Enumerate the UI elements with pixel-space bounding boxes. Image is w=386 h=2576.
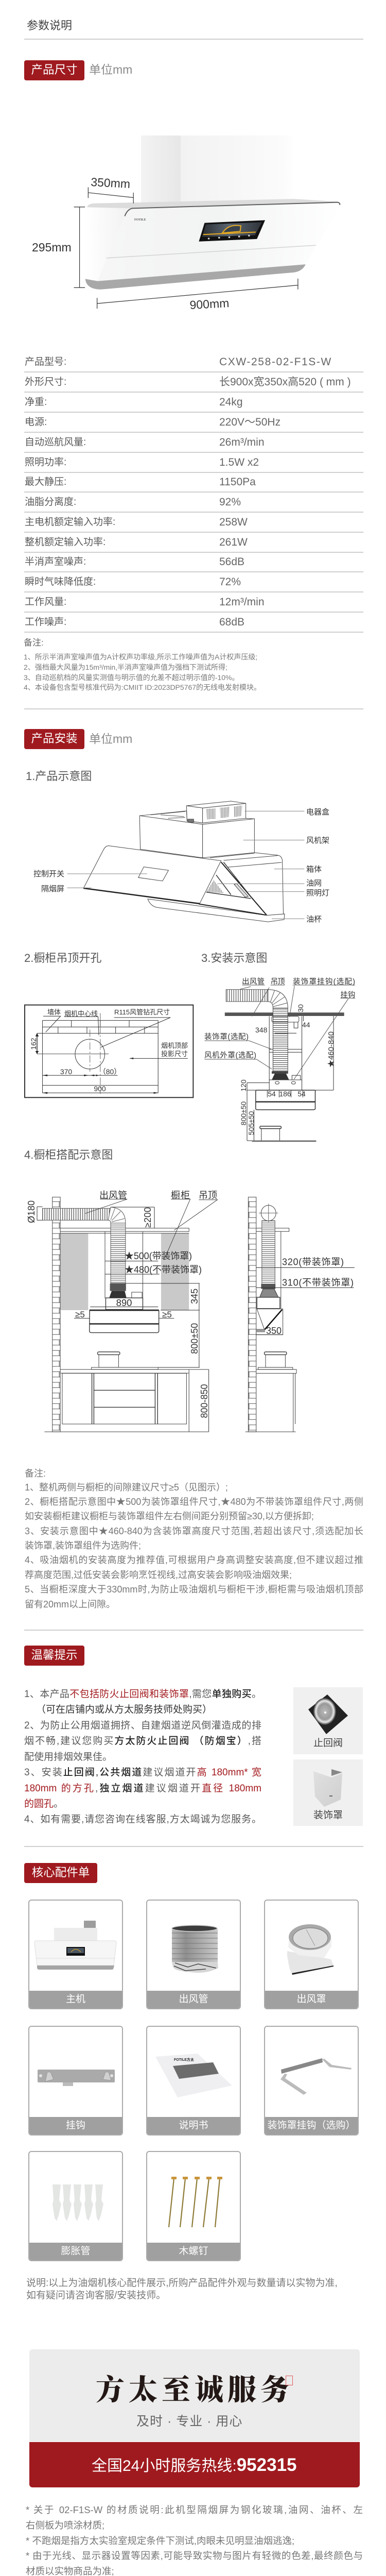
front elevation labels: ★500(带装饰罩) — [125, 1251, 192, 1261]
leader lines — [67, 811, 304, 919]
spec row: 主电机额定输入功率: — [25, 517, 115, 528]
front elevation labels: 吊顶 — [199, 1190, 217, 1200]
diagram 3 labels: 800±50 — [239, 1101, 248, 1125]
spec row — [24, 453, 363, 473]
diagram 3 labels: 186 — [279, 1090, 291, 1098]
diagram 4: cabinet fit drawings — [26, 1190, 355, 1432]
tip 2 end: 配使用排烟效果佳。 — [24, 1752, 112, 1762]
footnote 3: * 由于光线、显示器设置等因素,可能导致实物与图片有轻微的色差,最终颜色与 — [26, 2550, 363, 2561]
diagram 3 labels: ★460-840 — [327, 1031, 336, 1067]
diagram 3 labels: 44 — [302, 1021, 310, 1029]
front elevation labels: 出风管 — [99, 1190, 127, 1200]
tip 4: 4、如有需要,请您咨询在线客服,方太竭诚为您服务。 — [24, 1814, 261, 1825]
spec row: 瞬时气味降低度: — [25, 577, 96, 587]
panel: check valve — [293, 1687, 363, 1754]
front elevation labels: 800-850 — [199, 1384, 209, 1418]
card: hook — [28, 2026, 123, 2136]
diagram 2 labels: 投影尺寸 — [161, 1050, 188, 1058]
fan frame — [139, 811, 254, 858]
diagram 3 labels: 54 — [268, 1090, 276, 1098]
spec row — [24, 393, 363, 413]
diagram labels: 箱体 — [306, 865, 322, 874]
note line 4 continued: 荐高度范围,过低安装会影响烹饪视线,过高安装会影响吸油烟效果; — [25, 1570, 292, 1580]
side elevation labels: 310(不带装饰罩) — [282, 1278, 354, 1288]
diagram 3 labels: 30 — [296, 1004, 305, 1012]
spec row: 1150Pa — [219, 476, 256, 488]
side elevation labels — [266, 1257, 354, 1336]
spec row: 工作风量: — [25, 597, 66, 607]
icon: decorative cover — [313, 1769, 342, 1807]
caption: 出风罩 — [296, 1994, 326, 2005]
spec row: 油脂分离度: — [25, 497, 76, 507]
image: wood screws — [168, 2177, 222, 2228]
front elevation labels: ≥5 — [75, 1310, 85, 1319]
section tag: installation — [24, 729, 84, 749]
section tag: product size — [24, 60, 84, 80]
spec row — [24, 533, 363, 553]
spec row — [24, 613, 363, 633]
diagram labels: 隔烟屏 — [41, 885, 64, 893]
diagram 2 labels: 370 — [60, 1067, 72, 1076]
diagram 2 labels — [29, 1008, 188, 1093]
diagram 2 labels: 烟机中心线 — [64, 1010, 98, 1018]
diagram 3 labels: 装饰罩挂钩(选配) — [293, 977, 355, 986]
tip 3: 3、安装止回阀,公共烟道建议烟道开高 180mm* 宽 — [24, 1767, 261, 1778]
spec row — [24, 592, 363, 613]
front elevation labels — [26, 1190, 217, 1418]
specification table — [24, 356, 363, 633]
image: hook plate — [38, 2070, 115, 2086]
accessories note: 说明:以上为油烟机核心配件展示,所购产品配件外观与数量请以实物为准, — [26, 2278, 338, 2289]
diagrams 2 and 3 — [24, 977, 355, 1142]
grease filter and light — [206, 862, 267, 916]
caption — [264, 2117, 359, 2136]
spec row — [24, 352, 363, 372]
diagram labels: 电器盒 — [306, 808, 329, 817]
footnote 2: * 不跑烟是指方太实验室规定条件下测试,肉眼未见明显油烟逃逸; — [26, 2535, 294, 2546]
spec row: 26m³/min — [219, 436, 265, 448]
caption — [28, 2243, 123, 2261]
note line 5: 5、当橱柜深度大于330mm时,为防止吸油烟机与橱柜干涉,橱柜需与吸油烟机顶部 — [25, 1584, 363, 1595]
cabinet body — [210, 853, 284, 914]
front elevation — [26, 1190, 217, 1432]
diagram labels: 油杯 — [306, 915, 322, 924]
tip 2 continued: 烟不畅,建议您购买方太防火止回阀 （防烟宝）,搭 — [24, 1736, 261, 1747]
image: outlet hood — [287, 1924, 334, 1975]
caption — [28, 1991, 123, 2009]
spec row: 电源: — [25, 417, 47, 428]
note line 3: 3、安装示意图中★460-840为含装饰罩高度尺寸范围,若超出该尺寸,须选配加长 — [25, 1526, 363, 1536]
tips text — [24, 1689, 261, 1825]
spec row — [24, 472, 363, 493]
section tag: installation: 产品安装 — [31, 732, 77, 745]
slogan subtitle: 及时 · 专业 · 用心 — [136, 2414, 242, 2429]
service card grey — [29, 2349, 360, 2442]
spec row: 56dB — [219, 556, 244, 568]
front elevation labels: ≥5 — [162, 1310, 172, 1319]
oil cup — [148, 899, 285, 922]
brand mark: FOTILE — [134, 218, 146, 222]
calligraphy slogan: 方太至诚服务 — [96, 2375, 293, 2406]
tip 1: 1、本产品不包括防火止回阀和装饰罩,需您单独购买。 — [24, 1689, 261, 1700]
valve caption: 止回阀 — [313, 1738, 343, 1749]
caption — [146, 2117, 241, 2136]
hotline text: 全国24小时服务热线:952315 — [92, 2455, 297, 2475]
page title: 参数说明 — [27, 19, 72, 32]
diagram 3 labels: 120 — [239, 1079, 248, 1092]
section tag: tips — [24, 1646, 84, 1666]
spec row: 92% — [219, 496, 241, 508]
panel: decorative cover — [293, 1759, 363, 1826]
note line 3 continued: 装饰罩,装饰罩组件为选购件; — [25, 1540, 141, 1551]
caption — [146, 1991, 241, 2009]
tip 3 end: 的圆孔。 — [24, 1799, 63, 1809]
notes heading: 备注: — [25, 1468, 46, 1479]
diagram 1: product schematic — [33, 801, 329, 924]
footnotes — [26, 2504, 363, 2576]
spec row: CXW-258-02-F1S-W — [219, 356, 332, 368]
diagram 2 labels: （80） — [99, 1067, 121, 1076]
front elevation labels: 橱柜 — [171, 1190, 190, 1200]
front elevation labels: 890 — [116, 1297, 132, 1308]
caption — [28, 2117, 123, 2136]
section tag: product size: 产品尺寸 — [31, 63, 77, 76]
diagram 3 labels — [204, 977, 355, 1135]
diagram 2 labels: 162 — [29, 1038, 38, 1050]
cover caption: 装饰罩 — [313, 1810, 343, 1821]
width label: 900mm — [189, 296, 230, 312]
tip 1 note: （可在店铺内或从方太服务技师处购买） — [36, 1704, 212, 1715]
spec row — [24, 493, 363, 513]
height label: 295mm — [32, 241, 72, 254]
hotline banner — [29, 2442, 360, 2487]
spec row: 68dB — [219, 616, 244, 628]
card: air outlet hood — [264, 1900, 359, 2009]
spec row: 半消声室噪声: — [25, 556, 86, 567]
spec row: 长900x宽350x高520 ( mm ) — [219, 376, 351, 388]
front elevation labels: 800±50 — [189, 1323, 200, 1354]
spec row: 工作噪声: — [25, 617, 66, 628]
heading: product diagram: 1.产品示意图 — [26, 770, 92, 783]
installation notes — [25, 1468, 363, 1609]
diagram 3 labels: 挂钩 — [340, 991, 355, 999]
card: main unit — [28, 1900, 123, 2009]
heading: cabinet fit: 4.橱柜搭配示意图 — [24, 1148, 113, 1161]
spec row: 261W — [219, 536, 248, 548]
note line 2 continued: 如安装橱柜建议橱柜与装饰罩组件左右侧间距分别预留≥30,以方便拆卸; — [25, 1511, 314, 1521]
image: manual — [155, 2054, 232, 2097]
image: wall plugs — [52, 2184, 103, 2221]
card: exhaust duct — [146, 1900, 241, 2009]
caption: 装饰罩挂钩（选购） — [267, 2120, 355, 2131]
image: range hood — [34, 1921, 117, 1970]
diagram 3 labels: 装饰罩(选配) — [204, 1032, 249, 1041]
spec row: 12m³/min — [219, 596, 265, 608]
note line 1: 1、整机两侧与橱柜的间隙建议尺寸≥5（见图示）; — [25, 1482, 228, 1493]
caption: 主机 — [66, 1994, 85, 2005]
spec row — [24, 513, 363, 533]
diagram labels: 油网 — [306, 879, 322, 888]
note line: 3、自动巡航档的风量实测值与明示值的允差不超过明示值的-10%。 — [24, 673, 239, 682]
heading: ceiling opening: 2.橱柜吊顶开孔 — [24, 952, 101, 964]
icon: check valve — [308, 1694, 348, 1734]
diagram 2 labels: 900 — [94, 1084, 106, 1093]
caption: 挂钩 — [66, 2120, 85, 2131]
product photo with dimensions — [32, 135, 341, 312]
spec row — [24, 413, 363, 433]
unit label: 单位mm — [89, 63, 132, 76]
caption — [264, 1991, 359, 2009]
diagram 3: installation side drawing — [204, 977, 355, 1142]
accessories note — [26, 2278, 338, 2301]
diagram 3 labels: 505±50 — [247, 1111, 255, 1135]
side elevation labels: 350 — [266, 1326, 282, 1336]
seal — [286, 2376, 293, 2385]
front elevation labels: 345 — [189, 1289, 200, 1304]
caption: 出风管 — [179, 1994, 208, 2005]
card: wall plugs — [28, 2151, 123, 2261]
section tag: core accessories: 核心配件单 — [32, 1866, 90, 1879]
tip 3 continued: 180mm 的方孔,独立烟道建议烟道开直径 180mm — [24, 1783, 261, 1794]
spec row — [24, 372, 363, 393]
note line: 1、所示半消声室噪声值为A计权声功率级,所示工作噪声值为A计权声压级; — [24, 653, 257, 661]
dimension lines — [74, 187, 298, 309]
note line 2: 2、橱柜搭配示意图中★500为装饰罩组件尺寸,★480为不带装饰罩组件尺寸,两侧 — [25, 1497, 363, 1507]
diagram 2 labels: 烟机顶部 — [161, 1042, 188, 1049]
image: foil duct — [171, 1925, 218, 1973]
caption: 木螺钉 — [179, 2246, 208, 2257]
diagram 2 labels: 墙体 — [47, 1008, 61, 1016]
diagram labels: 照明灯 — [306, 889, 329, 897]
notes heading: 备注: — [24, 638, 44, 648]
service panel — [29, 2349, 360, 2487]
card: manual — [146, 2026, 241, 2136]
spec row — [24, 552, 363, 572]
tip 2: 2、为防止公用烟道拥挤、自建烟道逆风倒灌造成的排 — [24, 1720, 261, 1731]
front elevation labels: ≥200 — [143, 1207, 153, 1228]
spec row: 照明功率: — [25, 457, 66, 468]
spec row: 整机额定输入功率: — [25, 537, 106, 548]
caption — [146, 2243, 241, 2261]
diagram 2: ceiling opening drawing — [25, 1005, 193, 1097]
spec notes — [24, 638, 261, 691]
diagram 2 labels: R115风管钻孔尺寸 — [114, 1008, 170, 1016]
spec row: 1.5W x2 — [219, 456, 259, 468]
spec row — [24, 572, 363, 592]
spec row: 外形尺寸: — [25, 377, 66, 387]
section tag: tips: 温馨提示 — [31, 1649, 77, 1662]
control display — [199, 220, 265, 242]
front elevation labels: ★480(不带装饰罩) — [125, 1264, 202, 1275]
electrical box — [186, 801, 246, 823]
note line 5 continued: 留有20mm以上间隙。 — [25, 1599, 115, 1609]
spec row: 净重: — [25, 397, 47, 408]
footnote 1 continued: 右侧板为喷涂材质; — [26, 2520, 104, 2531]
unit label: 单位mm — [89, 732, 132, 745]
note line: 2、强档最大风量为15m³/min,半消声室噪声值为强档下测试所得; — [24, 663, 227, 671]
spec row — [24, 433, 363, 453]
note line: 4、本设备包含型号核准代码为:CMIIT ID:2023DP5767的无线电发射模块。 — [24, 683, 261, 691]
spec row: 自动巡航风量: — [25, 437, 86, 448]
depth label: 350mm — [91, 175, 131, 191]
accessories note: 如有疑问请咨询客服/安装技师。 — [26, 2290, 166, 2301]
spec row: 72% — [219, 576, 241, 588]
diagram 3 labels: 348 — [255, 1026, 268, 1034]
diagram labels: 风机架 — [306, 836, 329, 845]
chimney cover — [141, 135, 294, 206]
note line 4: 4、吸油烟机的安装高度为推荐值,可根据用户身高调整安装高度,但不建议超过推 — [25, 1555, 363, 1565]
caption: 说明书 — [179, 2120, 208, 2131]
card: cover hook — [264, 2026, 359, 2136]
spec row: 最大静压: — [25, 477, 66, 487]
smoke screen panel — [83, 846, 221, 904]
section tag: core accessories — [24, 1863, 97, 1883]
footnote 1: * 关于 02-F1S-W 的材质说明:此机型隔烟屏为钢化玻璃,油网、油杯、左 — [26, 2504, 363, 2515]
front elevation labels: Ø180 — [26, 1200, 37, 1223]
spec row: 258W — [219, 516, 248, 528]
caption: 膨胀管 — [61, 2246, 91, 2257]
side elevation labels: 320(带装饰罩) — [282, 1257, 344, 1267]
diagram labels — [33, 808, 329, 924]
hood body — [85, 199, 340, 290]
image: cover bracket — [280, 2058, 352, 2095]
side elevation — [245, 1197, 355, 1432]
diagram 3 labels: 出风管 — [242, 977, 265, 986]
diagram 3 labels: 54 — [297, 1090, 306, 1098]
image: manual: FOTILE方太 — [174, 2057, 194, 2062]
diagram labels: 控制开关 — [33, 870, 64, 878]
spec row: 产品型号: — [25, 357, 66, 367]
diagram 3 labels: 风机外罩(选配) — [204, 1051, 256, 1060]
spec row: 220V～50Hz — [219, 416, 280, 428]
spec row: 24kg — [219, 396, 243, 408]
card: wood screws — [146, 2151, 241, 2261]
diagram 3 labels: 吊顶 — [271, 978, 285, 986]
heading: installation diagram: 3.安装示意图 — [201, 952, 267, 964]
